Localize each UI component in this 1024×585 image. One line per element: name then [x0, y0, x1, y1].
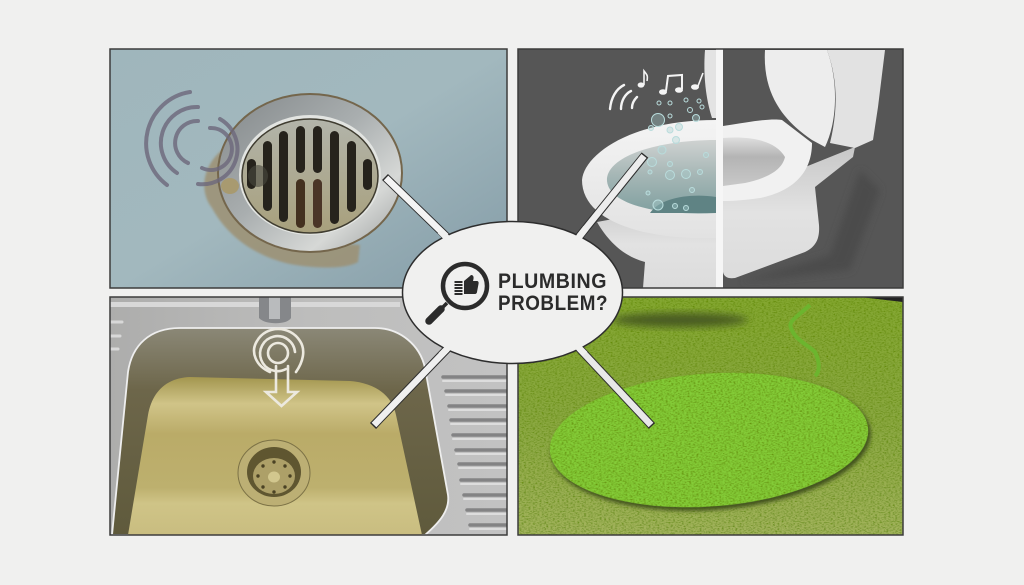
- grate: [242, 119, 378, 233]
- stain drop: [221, 178, 239, 194]
- pedestal: [597, 220, 716, 288]
- drain fitting: [217, 93, 403, 253]
- lid: [765, 50, 835, 147]
- green seep line: [790, 305, 819, 376]
- toilet left half, bubbling: [582, 50, 716, 288]
- water stain: [204, 150, 360, 268]
- water in bowl: [650, 196, 716, 213]
- connector joins: [440, 228, 586, 355]
- toilet right half, clean: [723, 50, 885, 282]
- strainer holes: [256, 460, 292, 494]
- ridges left: [110, 322, 122, 349]
- faucet: [259, 297, 291, 323]
- white divider: [716, 49, 723, 288]
- seat: [723, 119, 812, 201]
- steel surround: [110, 297, 507, 535]
- callout ellipse: [402, 222, 622, 364]
- patch shadow: [547, 365, 875, 521]
- panel: green lawn patch: [518, 297, 903, 535]
- faucet highlight: [269, 297, 280, 319]
- note 3: [691, 73, 703, 90]
- icon: sound arcs: [610, 85, 637, 109]
- seat: [582, 120, 716, 238]
- floor background: [110, 49, 507, 288]
- drain: [238, 440, 310, 506]
- panel: slow sink: [110, 297, 510, 535]
- drain flange: [238, 440, 310, 506]
- connector: bottom right: [578, 347, 652, 426]
- note 2: [659, 75, 683, 95]
- icon: magnifier with thumbs up: [429, 264, 487, 321]
- connector lines: [373, 155, 652, 426]
- connector: top right: [578, 155, 645, 238]
- steel ring: [219, 95, 401, 251]
- top-right shadow: [860, 297, 903, 302]
- icon: music notes: [638, 71, 703, 95]
- panel: floor drain: [110, 49, 507, 288]
- handle: [441, 303, 447, 309]
- inner rim: [239, 115, 381, 235]
- lawn shadow: [612, 313, 748, 327]
- bowl opening: [723, 138, 785, 186]
- heading line 2: PROBLEM?: [498, 292, 608, 315]
- icon: sound waves: [146, 92, 237, 185]
- icon: swirl with down arrow: [254, 329, 303, 406]
- strainer knob: [268, 472, 280, 482]
- tank: [827, 50, 885, 148]
- soft shadow: [782, 178, 876, 274]
- heading: [498, 270, 608, 315]
- lush grass patch: [545, 363, 873, 517]
- cuff lines: [454, 281, 462, 295]
- note 1: [638, 71, 647, 88]
- base: [723, 147, 855, 278]
- lawn: [518, 297, 903, 535]
- bowl: [607, 140, 716, 213]
- ridge highlights: [443, 381, 510, 529]
- strainer: [253, 458, 295, 494]
- grate slots: [247, 126, 372, 228]
- thumb: [464, 275, 479, 294]
- water: [128, 377, 422, 535]
- connector: bottom left: [373, 348, 448, 426]
- connector: top left: [385, 177, 448, 238]
- bubbles: [646, 98, 708, 210]
- basin wall: [112, 328, 448, 535]
- strainer rim: [247, 447, 301, 497]
- lid edge: [704, 50, 716, 118]
- grime on grate: [248, 165, 268, 187]
- panel: toilet: [518, 49, 903, 288]
- central callout: [402, 222, 622, 364]
- ridges right: [443, 377, 510, 525]
- heading line 1: PLUMBING: [498, 270, 607, 293]
- lens: [443, 264, 487, 308]
- bright rim band: [110, 302, 400, 307]
- outer rust edge: [217, 93, 403, 253]
- dark backdrop: [518, 49, 903, 288]
- panel frames: [110, 49, 903, 535]
